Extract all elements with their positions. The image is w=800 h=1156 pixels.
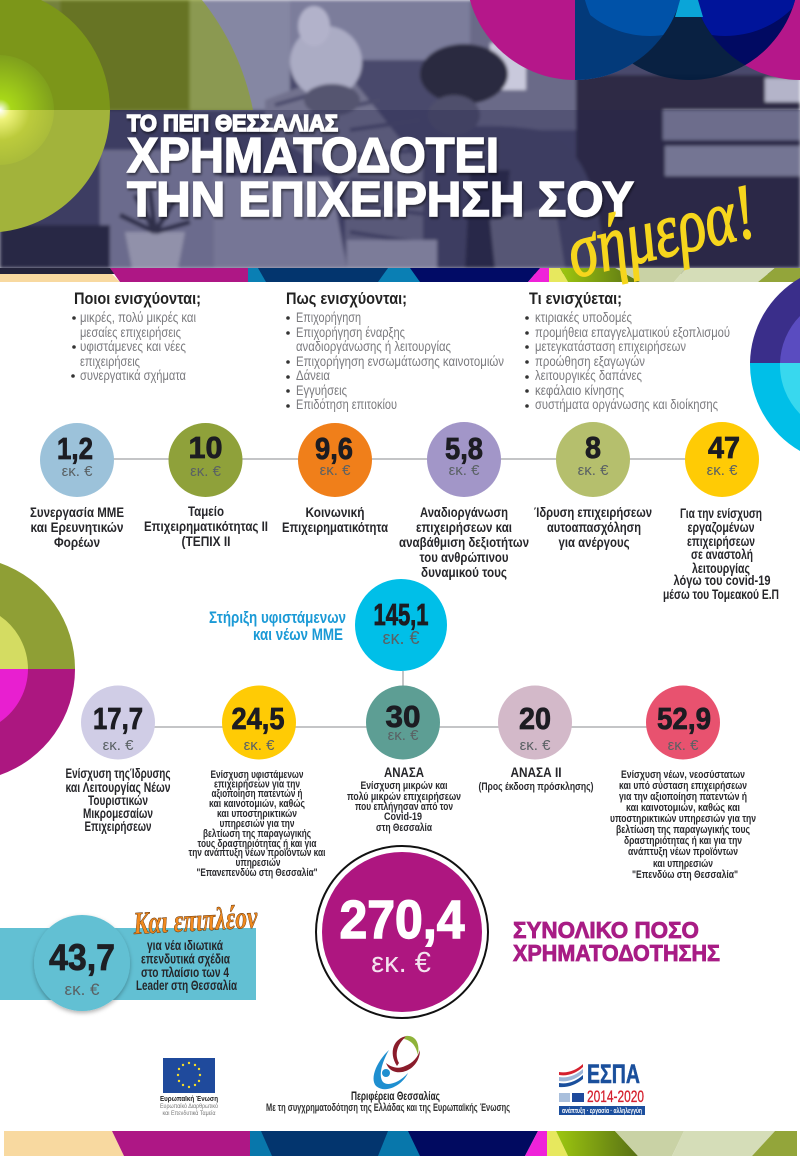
metric: 8: εκ. € bbox=[578, 462, 609, 479]
metric: 17,7: Τουριστικών bbox=[88, 792, 148, 808]
metric: 145,1 support for existing and new SMEs: 145,1 bbox=[374, 597, 428, 632]
metric: 24,5: Ενίσχυση υφιστάμενων bbox=[210, 769, 304, 781]
metric: 47 bbox=[663, 422, 779, 602]
metric: 17,7: και Λειτουργίας Νέων bbox=[66, 779, 171, 795]
decorative circle right bbox=[750, 278, 800, 451]
metric: 8 bbox=[534, 422, 652, 550]
metric: 9,6: 9,6 bbox=[315, 431, 353, 466]
metric: 10: Επιχειρηματικότητας ΙΙ bbox=[144, 518, 268, 534]
decorative circle left bbox=[0, 563, 75, 775]
metric: 24,5: "Επανεπενδύω στη Θεσσαλία" bbox=[196, 867, 318, 879]
callout: and additionally 43,7 Leader: Leader στη Θεσσαλία bbox=[136, 977, 237, 993]
metric: 1,2: εκ. € bbox=[62, 463, 93, 480]
total amount label: ΧΡΗΜΑΤΟΔΟΤΗΣΗΣ bbox=[513, 940, 720, 966]
metric: 20 ΑΝΑΣΑ ΙΙ: (Προς έκδοση πρόσκλησης) bbox=[478, 781, 594, 793]
logo: Region of Thessaly: Περιφέρεια Θεσσαλίας bbox=[351, 1089, 440, 1103]
bullet list: Επιχορήγηση έναρξης bbox=[296, 324, 405, 340]
metric: 47: 47 bbox=[708, 430, 740, 465]
heading: Πως ενισχύονται; bbox=[286, 289, 407, 308]
metric: 145,1 support for existing and new SMEs bbox=[209, 579, 447, 671]
metric: 10: (ΤΕΠΙΧ ΙΙ bbox=[182, 533, 230, 549]
metric: 20 ΑΝΑΣΑ ΙΙ: ΑΝΑΣΑ ΙΙ bbox=[510, 764, 562, 780]
metric: 5,8: εκ. € bbox=[449, 462, 480, 479]
total amount circle: 270,4 bbox=[340, 890, 464, 950]
metric: 5,8: του ανθρώπινου bbox=[420, 549, 508, 565]
header photo: two colleagues at a laptop bbox=[0, 0, 800, 268]
metric: 17,7 bbox=[66, 686, 171, 834]
metric: 52,9: εκ. € bbox=[668, 737, 699, 754]
metric: 52,9: και καινοτομιών, καθώς και bbox=[626, 802, 740, 814]
metric: 30 ΑΝΑΣΑ: Ενίσχυση μικρών και bbox=[360, 780, 448, 792]
bullet list: μεσαίες επιχειρήσεις bbox=[80, 324, 181, 340]
metric: 1,2: και Ερευνητικών bbox=[30, 519, 124, 535]
metric: 1,2 bbox=[30, 423, 124, 550]
metric: 47: εκ. € bbox=[707, 462, 738, 479]
bullet list: Επιχορήγηση bbox=[296, 309, 361, 325]
metric: 8: 8 bbox=[585, 430, 601, 465]
logo: Region of Thessaly bbox=[266, 1036, 510, 1114]
bullet list: κεφάλαιο κίνησης bbox=[535, 382, 624, 398]
metric: 1,2: Συνεργασία ΜΜΕ bbox=[30, 504, 124, 520]
logo: European Union: Ευρωπαϊκή Ένωση bbox=[160, 1096, 218, 1103]
metric: 52,9: δραστηριότητας ή και για την bbox=[624, 835, 742, 847]
logo: ESPA 2014-2020: ανάπτυξη · εργασία · αλληλεγγύη bbox=[562, 1107, 642, 1115]
metric: 52,9: υποστηρικτικών υπηρεσιών για την bbox=[610, 813, 756, 825]
metric: 20 ΑΝΑΣΑ ΙΙ bbox=[478, 686, 594, 793]
metric: 30 ΑΝΑΣΑ bbox=[347, 686, 461, 834]
metric: 52,9: 52,9 bbox=[657, 701, 711, 736]
logo: ESPA 2014-2020 bbox=[559, 1059, 645, 1115]
metric: 5,8 bbox=[399, 422, 529, 580]
metric: 47: σε αναστολή bbox=[691, 546, 753, 562]
metric: 30 ΑΝΑΣΑ: ΑΝΑΣΑ bbox=[384, 764, 424, 780]
bullet list: Δάνεια bbox=[296, 367, 330, 383]
callout: and additionally 43,7 Leader: 43,7 bbox=[49, 937, 115, 978]
metric: 5,8: δυναμικού τους bbox=[421, 564, 507, 580]
logo: European Union: Ευρωπαϊκό Διαρθρωτικό bbox=[160, 1102, 218, 1110]
bullet list: επιχειρήσεις bbox=[80, 353, 140, 369]
metric: 10: 10 bbox=[188, 430, 222, 465]
metric: 24,5: τους δραστηριότητας ή και για bbox=[198, 838, 317, 850]
callout: and additionally 43,7 Leader: για νέα ιδιωτικά bbox=[147, 937, 223, 953]
metric: 47: λόγω του covid-19 bbox=[674, 572, 771, 588]
callout: and additionally 43,7 Leader: επενδυτικά σχέδια bbox=[141, 950, 230, 966]
metric: 17,7: εκ. € bbox=[103, 737, 134, 754]
metric: 1,2: 1,2 bbox=[57, 431, 93, 466]
panel: who is funded bbox=[71, 289, 201, 383]
title line 1: ΤΟ ΠΕΠ ΘΕΣΣΑΛΙΑΣ bbox=[127, 110, 338, 136]
logo: Region of Thessaly: Με τη συγχρηματοδότηση της Ελλάδας και της Ευρωπαϊκής Ένωσης bbox=[266, 1102, 510, 1114]
metric: 9,6: εκ. € bbox=[320, 462, 351, 479]
metric: 9,6: Επιχειρηματικότητα bbox=[282, 519, 388, 535]
total amount circle: εκ. € bbox=[371, 947, 431, 979]
total amount circle bbox=[316, 846, 488, 1018]
metric: 17,7: Ενίσχυση τηςΊδρυσης bbox=[66, 765, 170, 781]
callout: and additionally 43,7 Leader: εκ. € bbox=[65, 980, 100, 999]
bullet list: συστήματα οργάνωσης και διοίκησης bbox=[535, 396, 718, 412]
bullet list: μετεγκατάσταση επιχειρήσεων bbox=[535, 338, 686, 354]
connector line row 1 bbox=[77, 458, 722, 460]
colour strip under header bbox=[0, 268, 800, 282]
metric: 145,1 support for existing and new SMEs: Στήριξη υφιστάμενων bbox=[209, 608, 346, 627]
title line 3: ΤΗΝ ΕΠΙΧΕΙΡΗΣΗ ΣΟΥ bbox=[127, 173, 634, 227]
bullet list: προώθηση εξαγωγών bbox=[535, 353, 645, 369]
metric: 10 bbox=[144, 423, 268, 549]
connector lines row 2 bbox=[118, 671, 683, 727]
metric: 10: εκ. € bbox=[190, 463, 222, 480]
bullet list: συνεργατικά σχήματα bbox=[80, 367, 186, 383]
metric: 52,9: ανάπτυξη νέων προϊόντων bbox=[628, 846, 738, 858]
metric: 47: λειτουργίας bbox=[692, 560, 750, 576]
bullet list: μικρές, πολύ μικρές και bbox=[80, 309, 196, 325]
logo: ESPA 2014-2020: 2014-2020 bbox=[587, 1087, 644, 1106]
metric: 20 ΑΝΑΣΑ ΙΙ: 20 bbox=[519, 701, 551, 736]
metric: 52,9: και υπηρεσιών bbox=[653, 858, 713, 870]
metric: 24,5: επιχειρήσεων για την bbox=[214, 778, 300, 790]
callout: and additionally 43,7 Leader: στο πλαίσιο των 4 bbox=[141, 964, 229, 980]
metric: 8: για ανέργους bbox=[558, 534, 630, 550]
metric: 5,8: Αναδιοργάνωση bbox=[420, 504, 508, 520]
overlapping circles top right of header bbox=[466, 0, 800, 85]
panel: how it is funded bbox=[286, 289, 504, 412]
metric: 145,1 support for existing and new SMEs: εκ. € bbox=[382, 628, 420, 648]
bullet list: Εγγυήσεις bbox=[296, 382, 347, 398]
metric: 24,5 bbox=[188, 686, 326, 879]
bullet list: αναδιοργάνωσης ή λειτουργίας bbox=[296, 338, 451, 354]
metric: 17,7: 17,7 bbox=[93, 701, 143, 736]
metric: 52,9: "Επενδύω στη Θεσσαλία" bbox=[632, 869, 738, 881]
metric: 30 ΑΝΑΣΑ: 30 bbox=[386, 699, 420, 734]
metric: 30 ΑΝΑΣΑ: Covid-19 bbox=[384, 811, 422, 823]
metric: 24,5: και καινοτομιών, καθώς bbox=[209, 798, 305, 810]
metric: 30 ΑΝΑΣΑ: πολύ μικρών επιχειρήσεων bbox=[347, 791, 461, 803]
metric: 30 ΑΝΑΣΑ: που επλήγησαν από τον bbox=[355, 801, 453, 813]
bullet list: υφιστάμενες και νέες bbox=[80, 338, 186, 354]
panel: what is funded bbox=[525, 289, 730, 412]
bullet list bbox=[71, 309, 196, 383]
total amount label: ΣΥΝΟΛΙΚΟ ΠΟΣΟ bbox=[513, 917, 699, 943]
logo: European Union: και Επενδυτικά Ταμεία bbox=[162, 1109, 216, 1117]
metric: 47: Για την ενίσχυση bbox=[680, 505, 762, 521]
green translucent circle top left of header bbox=[0, 0, 253, 232]
bullet list: Επιδότηση επιτοκίου bbox=[296, 396, 397, 412]
bullet list: λειτουργικές δαπάνες bbox=[535, 367, 642, 383]
title line 2: ΧΡΗΜΑΤΟΔΟΤΕΙ bbox=[127, 129, 499, 183]
metric: 47: εργαζομένων bbox=[688, 519, 755, 535]
metric: 8: αυτοαπασχόληση bbox=[547, 519, 641, 535]
total amount label bbox=[513, 917, 720, 966]
metric: 24,5: βελτίωση της παραγωγικής bbox=[203, 828, 311, 840]
metric: 8: Ίδρυση επιχειρήσεων bbox=[534, 504, 652, 520]
metric: 30 ΑΝΑΣΑ: στη Θεσσαλία bbox=[376, 822, 432, 834]
metric: 52,9: βελτίωση της παραγωγικής τους bbox=[616, 824, 750, 836]
bullet list: Επιχορήγηση ενσωμάτωσης καινοτομιών bbox=[296, 353, 504, 369]
metric: 17,7: Μικρομεσαίων bbox=[83, 805, 153, 821]
metric: 9,6: Κοινωνική bbox=[306, 504, 364, 520]
metric: 145,1 support for existing and new SMEs: και νέων ΜΜΕ bbox=[253, 625, 343, 644]
logo: ESPA 2014-2020: ΕΣΠΑ bbox=[587, 1059, 640, 1089]
metric: 52,9: για την αξιοποίηση πατεντών ή bbox=[619, 791, 747, 803]
metric: 24,5: αξιοποίηση πατεντών ή bbox=[212, 788, 303, 800]
title bbox=[127, 110, 634, 227]
metric: 5,8: επιχειρήσεων και bbox=[416, 519, 512, 535]
logo: European Union bbox=[160, 1058, 218, 1117]
metric: 24,5: εκ. € bbox=[244, 737, 275, 754]
metric: 24,5: υπηρεσιών για την bbox=[220, 818, 294, 830]
heading: Τι ενισχύεται; bbox=[529, 289, 622, 308]
callout: and additionally 43,7 Leader bbox=[0, 899, 259, 1011]
metric: 1,2: Φορέων bbox=[54, 534, 100, 550]
metric: 47: επιχειρήσεων bbox=[687, 533, 755, 549]
bullet list bbox=[286, 309, 504, 412]
metric: 52,9: και υπό σύσταση επιχειρήσεων bbox=[619, 780, 747, 792]
metric: 52,9 bbox=[610, 686, 756, 881]
bullet list bbox=[525, 309, 730, 412]
metric: 30 ΑΝΑΣΑ: εκ. € bbox=[388, 727, 419, 744]
metric: 24,5: την ανάπτυξη νέων προϊόντων και bbox=[188, 847, 326, 859]
colour strip at bottom bbox=[4, 1131, 797, 1156]
metric: 5,8: 5,8 bbox=[445, 431, 483, 466]
heading: Ποιοι ενισχύονται; bbox=[74, 289, 201, 308]
metric: 5,8: αναβάθμιση δεξιοτήτων bbox=[399, 534, 529, 550]
metric: 10: Ταμείο bbox=[188, 503, 224, 519]
bullet list: προμήθεια επαγγελματικού εξοπλισμού bbox=[535, 324, 730, 340]
metric: 20 ΑΝΑΣΑ ΙΙ: εκ. € bbox=[520, 737, 551, 754]
metric: 24,5: 24,5 bbox=[232, 701, 284, 736]
metric: 9,6 bbox=[282, 423, 388, 535]
bullet list: κτιριακές υποδομές bbox=[535, 309, 632, 325]
metric: 52,9: Ενίσχυση νέων, νεοσύστατων bbox=[621, 769, 745, 781]
metric: 17,7: Επιχειρήσεων bbox=[84, 818, 152, 834]
callout: and additionally 43,7 Leader: Και επιπλέον bbox=[132, 899, 259, 941]
metric: 24,5: και υποστηρικτικών bbox=[217, 808, 297, 820]
metric: 24,5: υπηρεσιών bbox=[236, 857, 280, 869]
